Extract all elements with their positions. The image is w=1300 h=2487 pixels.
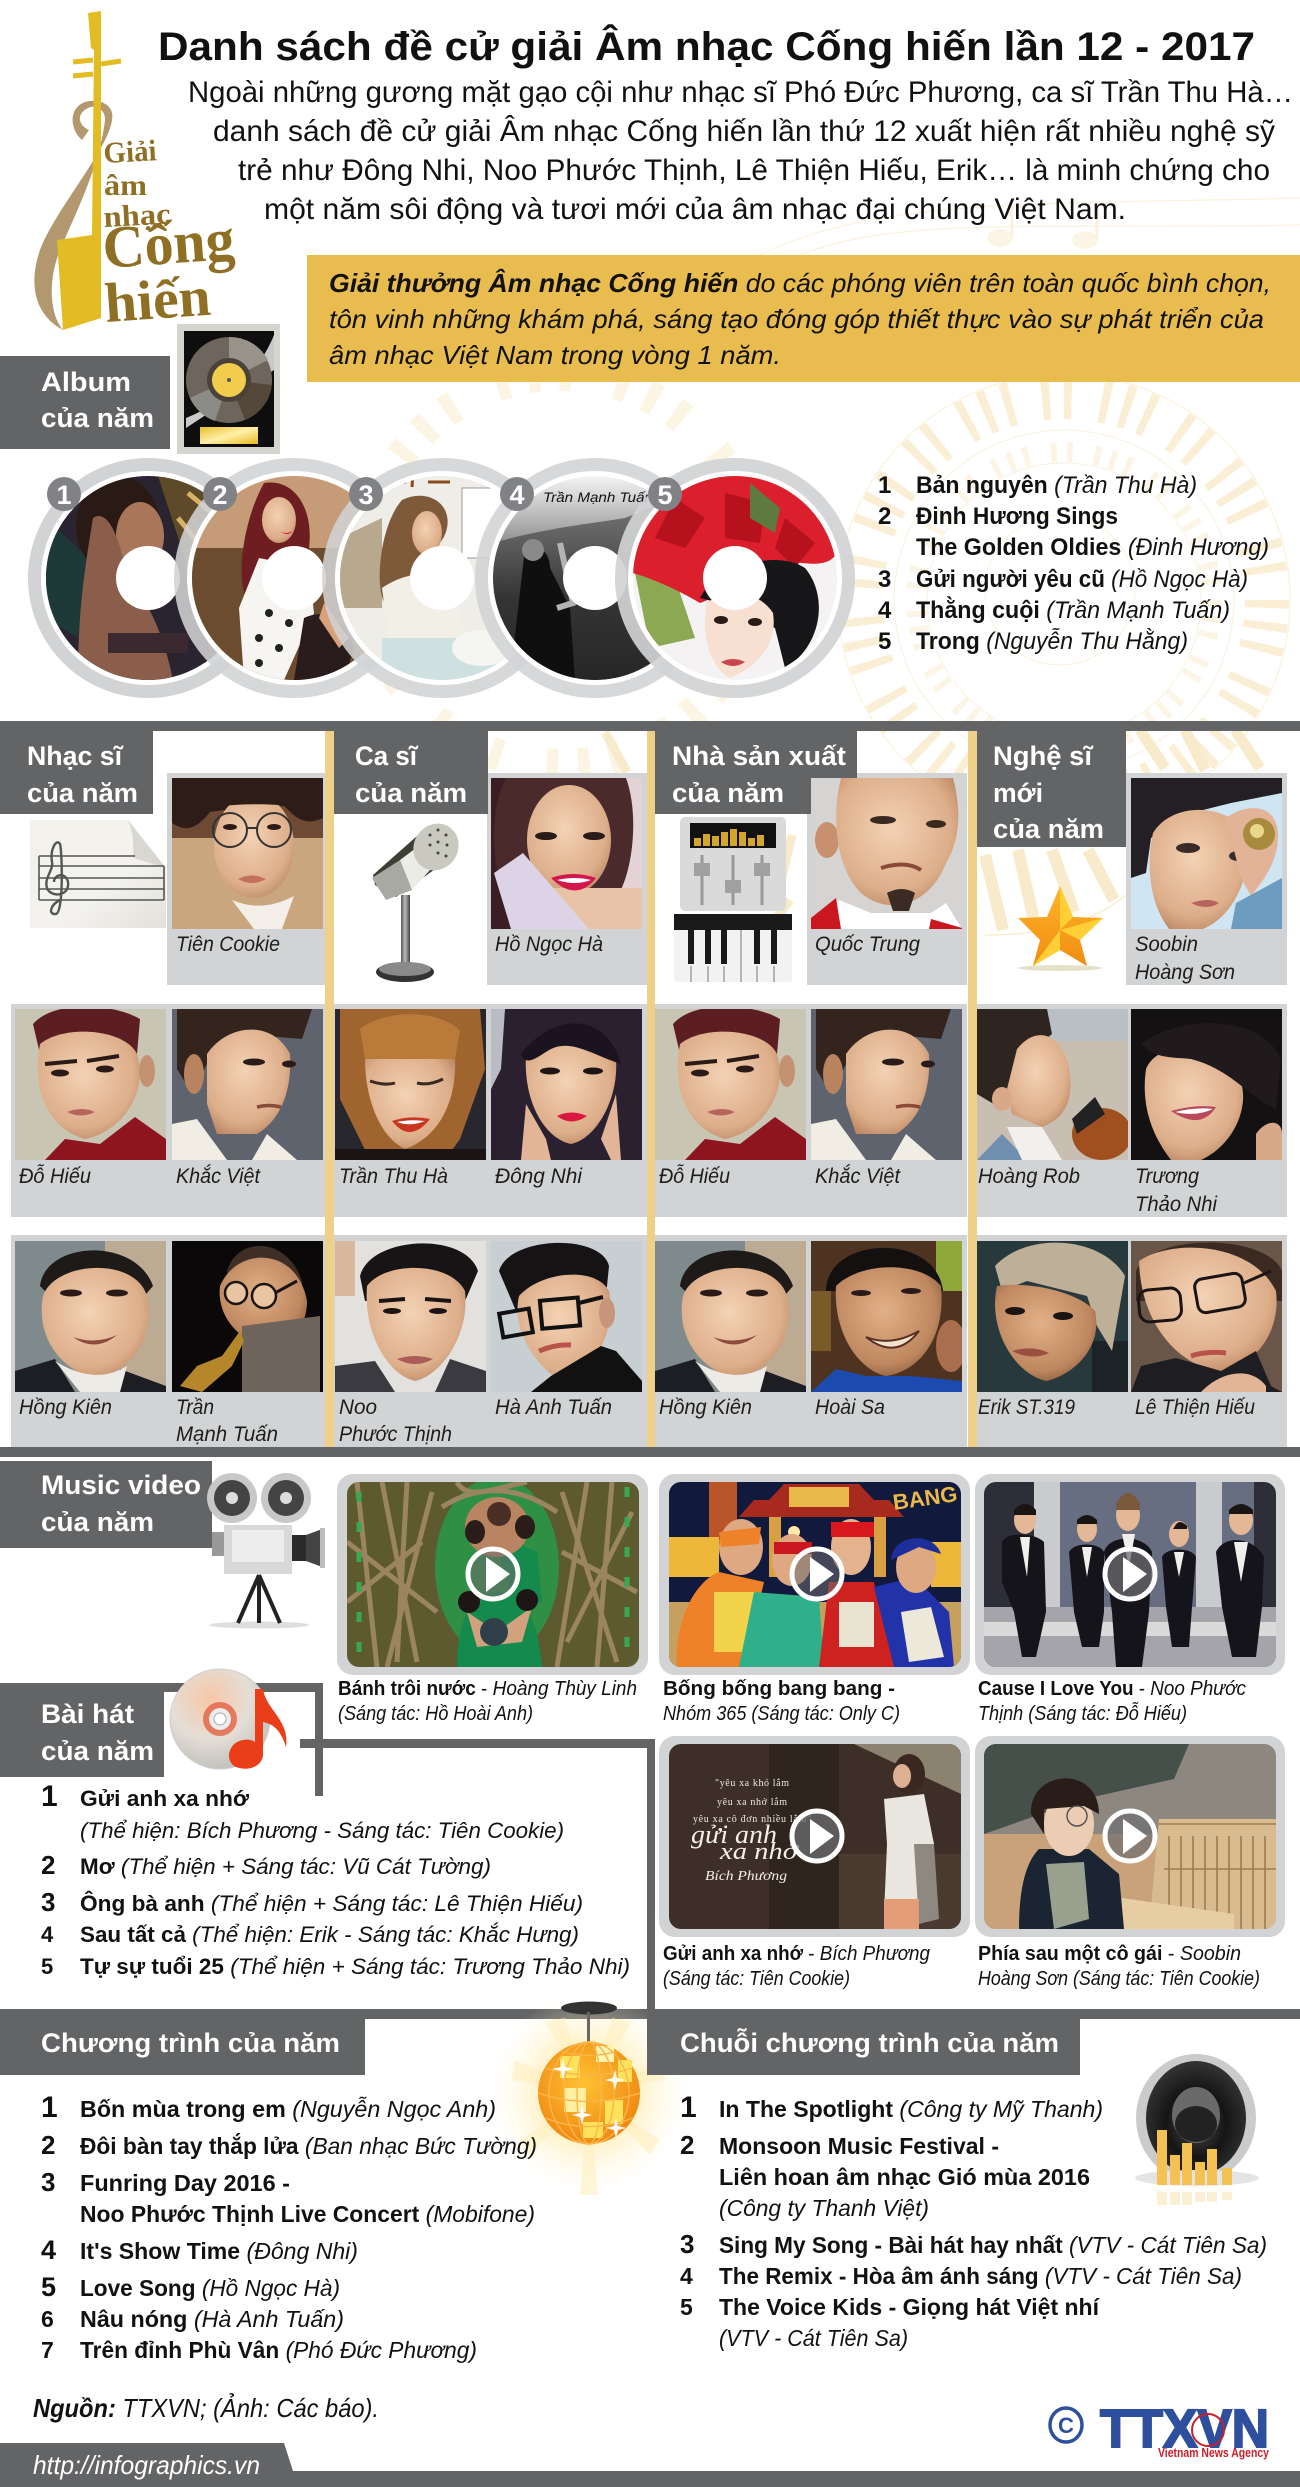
heading: Music video của năm: Music video — [41, 1470, 201, 1500]
list: programmes of the year: Đôi bàn tay thắp lửa (Ban nhạc Bức Tường) — [80, 2132, 537, 2159]
heading: Chuỗi chương trình của năm: Chuỗi chương trình của năm — [680, 2027, 1059, 2058]
source note: Nguồn: TTXVN; (Ảnh: Các báo). — [33, 2392, 379, 2423]
list: songs of the year — [41, 1780, 630, 1979]
video card: Gửi anh xa nhớ — [659, 1736, 970, 1990]
icon: film projector — [207, 1473, 325, 1628]
list: programme series of the year: Sing My Song - Bài hát hay nhất (VTV - Cát Tiên Sa) — [719, 2232, 1267, 2258]
video card: Phía sau một cô gái — [975, 1736, 1285, 1990]
icon: disco ball — [489, 1993, 689, 2195]
logo: TTXVN Vietnam News Agency: Vietnam News Agency — [1158, 2445, 1270, 2460]
heading: Ca sĩ của năm: Ca sĩ — [355, 741, 418, 771]
person: Hồng Kiên — [15, 1241, 166, 1419]
connector lines — [150, 1683, 655, 2014]
icon: speaker with equalizer — [1135, 2054, 1259, 2205]
icon: CD and music note — [170, 1669, 286, 1769]
list: songs of the year: Mơ (Thể hiện + Sáng tác: Vũ Cát Tường) — [80, 1854, 491, 1879]
list: programmes of the year: 2 — [41, 2130, 55, 2160]
heading: Music video của năm — [0, 1461, 212, 1548]
person: Hồng Kiên (producer) — [655, 1241, 806, 1419]
video card: Phía sau một cô gái: Hoàng Sơn (Sáng tác: Tiên Cookie) — [978, 1968, 1260, 1990]
heading: Nghệ sĩ mới của năm: Nghệ sĩ — [993, 741, 1094, 771]
list: programmes of the year: Love Song (Hồ Ngọc Hà) — [80, 2275, 340, 2301]
icon: sheet music — [30, 820, 166, 928]
video card: Gửi anh xa nhớ: yêu xa nhớ lắm — [717, 1797, 787, 1808]
person: Noo Phước Thịnh: Phước Thịnh — [339, 1423, 452, 1446]
list: programmes of the year: Trên đỉnh Phù Vân (Phó Đức Phương) — [80, 2337, 477, 2363]
list: programme series of the year: The Remix - Hòa âm ánh sáng (VTV - Cát Tiên Sa) — [719, 2263, 1242, 2289]
person: Hoàng Rob — [977, 1009, 1132, 1188]
video card: Phía sau một cô gái: Phía sau một cô gái - Soobin — [978, 1943, 1241, 1965]
list: songs of the year: 3 — [41, 1887, 55, 1917]
person: Hồng Kiên: Hồng Kiên — [19, 1396, 112, 1419]
album list: 1 — [878, 472, 891, 499]
list: programmes of the year — [41, 2091, 537, 2363]
heading: Bài hát của năm: của năm — [41, 1736, 154, 1766]
heading: Chuỗi chương trình của năm — [647, 2009, 1080, 2075]
logo: TTXVN Vietnam News Agency: C — [1058, 2413, 1074, 2438]
list: programme series of the year: (VTV - Cát Tiên Sa) — [719, 2325, 908, 2351]
person: Lê Thiện Hiếu: Lê Thiện Hiếu — [1135, 1396, 1255, 1419]
heading: Nhà sản xuất của năm: của năm — [672, 778, 784, 808]
person: Erik ST.319 — [977, 1241, 1128, 1419]
person: Hoài Sa — [811, 1241, 966, 1419]
person: Noo Phước Thịnh: Noo — [339, 1396, 377, 1419]
video card: Bống bống bang bang — [659, 1474, 970, 1725]
list: songs of the year: 5 — [41, 1954, 53, 1979]
disc number badges: 5 — [657, 480, 673, 510]
person: Khắc Việt — [172, 1009, 323, 1188]
disc 4: Trần Mạnh Tuấn — [543, 489, 653, 505]
intro paragraph: danh sách đề cử giải Âm nhạc Cống hiến lần thứ 12 xuất hiện rất nhiều nghệ sỹ — [213, 115, 1275, 148]
video card: Cause I Love You: Cause I Love You - Noo Phước — [978, 1678, 1246, 1700]
heading: Nghệ sĩ mới của năm — [977, 731, 1126, 847]
video card: Gửi anh xa nhớ: (Sáng tác: Tiên Cookie) — [663, 1968, 850, 1990]
heading: Nhạc sĩ của năm: Nhạc sĩ — [27, 741, 123, 771]
list: programme series of the year: (Công ty Thanh Việt) — [719, 2195, 929, 2221]
video card: Gửi anh xa nhớ: xa nhớ — [719, 1839, 799, 1865]
album list: Đinh Hương Sings — [916, 503, 1118, 530]
list: songs of the year: Ông bà anh (Thể hiện + Sáng tác: Lê Thiện Hiếu) — [80, 1891, 583, 1916]
video card: Gửi anh xa nhớ: yêu xa cô đơn nhiều lắm" — [693, 1814, 811, 1825]
album list — [878, 472, 1269, 655]
list: programmes of the year: Nâu nóng (Hà Anh Tuấn) — [80, 2306, 344, 2332]
album list: Trong (Nguyễn Thu Hằng) — [916, 627, 1188, 655]
person: Quốc Trung — [811, 778, 962, 956]
heading: Ca sĩ của năm: của năm — [355, 778, 467, 808]
intro paragraph — [188, 76, 1293, 226]
person: Khắc Việt (producer): Khắc Việt — [815, 1165, 901, 1188]
video card: Bánh trôi nước: (Sáng tác: Hồ Hoài Anh) — [338, 1703, 533, 1725]
icon: gold record — [177, 324, 280, 454]
logo: Giải Âm nhạc Cống hiến: hiến — [103, 266, 213, 335]
person: Hoàng Rob: Hoàng Rob — [978, 1165, 1080, 1188]
list: programme series of the year: In The Spotlight (Công ty Mỹ Thanh) — [719, 2096, 1103, 2122]
footer bar with URL — [0, 2443, 1300, 2487]
heading: Album của năm: Album — [41, 367, 131, 397]
list: programme series of the year: 2 — [680, 2130, 694, 2160]
disc 3 — [322, 458, 518, 698]
album list: The Golden Oldies (Đinh Hương) — [916, 534, 1269, 561]
person: Hồ Ngọc Hà — [491, 778, 642, 956]
heading: Bài hát của năm: Bài hát — [41, 1699, 134, 1729]
panel: award description: tôn vinh những khám phá, sáng tạo đóng góp thiết thực vào sự phát triển của — [329, 304, 1264, 334]
person: Đông Nhi: Đông Nhi — [495, 1165, 583, 1188]
logo: Giải Âm nhạc Cống hiến: nhạc — [103, 198, 171, 234]
disc 1 — [28, 458, 221, 698]
list: programmes of the year: 4 — [41, 2235, 56, 2265]
person: Khắc Việt (producer) — [811, 1009, 962, 1188]
heading: Nhà sản xuất của năm — [655, 731, 857, 814]
list: songs of the year: 2 — [41, 1850, 55, 1880]
list: programme series of the year: Liên hoan âm nhạc Gió mùa 2016 — [719, 2164, 1090, 2190]
heading: Nhạc sĩ của năm — [0, 731, 153, 814]
video card: Bống bống bang bang: Nhóm 365 (Sáng tác: Only C) — [663, 1703, 900, 1725]
person: Hà Anh Tuấn: Hà Anh Tuấn — [495, 1396, 612, 1419]
disc number badges: 3 — [358, 480, 374, 510]
album list: 2 — [878, 503, 891, 530]
list: songs of the year: 4 — [41, 1922, 54, 1947]
person: Noo Phước Thịnh — [335, 1241, 486, 1446]
icon: mixer and piano keys — [674, 817, 792, 982]
person: Trần Mạnh Tuấn: Trần — [176, 1396, 214, 1419]
list: songs of the year: (Thể hiện: Bích Phương - Sáng tác: Tiên Cookie) — [80, 1818, 564, 1843]
person: Trần Mạnh Tuấn — [172, 1241, 323, 1446]
list: programme series of the year — [680, 2091, 1267, 2351]
list: programme series of the year: 5 — [680, 2294, 693, 2320]
list: programmes of the year: 6 — [41, 2306, 54, 2332]
person: Trương Thảo Nhi: Trương — [1135, 1165, 1199, 1188]
person: Soobin Hoàng Sơn: Hoàng Sơn — [1135, 961, 1235, 984]
person: Hồ Ngọc Hà: Hồ Ngọc Hà — [495, 933, 603, 956]
person: Trương Thảo Nhi — [1131, 1009, 1282, 1216]
footer bar with URL: http://infographics.vn — [33, 2450, 260, 2480]
panel: award description — [307, 255, 1300, 382]
video card: Cause I Love You — [975, 1474, 1285, 1725]
panel: award description: âm nhạc Việt Nam trong vòng 1 năm. — [329, 340, 781, 370]
people section frame bars — [0, 721, 1300, 1457]
disc 2 — [174, 458, 368, 698]
person: Lê Thiện Hiếu — [1131, 1241, 1282, 1419]
list: programmes of the year: 7 — [41, 2337, 54, 2363]
logo: TTXVN Vietnam News Agency: TTXVN — [1100, 2399, 1269, 2459]
heading: Chương trình của năm: Chương trình của năm — [41, 2028, 340, 2058]
list: programmes of the year: 5 — [41, 2272, 56, 2302]
heading: Nghệ sĩ mới của năm: của năm — [993, 814, 1104, 844]
list: songs of the year: Tự sự tuổi 25 (Thể hiện + Sáng tác: Trương Thảo Nhi) — [80, 1954, 630, 1979]
list: songs of the year: 1 — [41, 1780, 58, 1813]
column dividers — [325, 731, 977, 1447]
icon: star — [1018, 886, 1103, 971]
heading: Music video của năm: của năm — [41, 1507, 154, 1537]
person: Erik ST.319: Erik ST.319 — [978, 1396, 1075, 1419]
album list: 5 — [878, 628, 891, 655]
heading: Album của năm: của năm — [41, 403, 154, 433]
video card: Cause I Love You: Thịnh (Sáng tác: Đỗ Hiếu) — [978, 1702, 1187, 1725]
person: Soobin Hoàng Sơn: Soobin — [1135, 933, 1198, 956]
logo: Giải Âm nhạc Cống hiến: âm — [104, 169, 147, 202]
person: Hà Anh Tuấn — [491, 1241, 642, 1419]
heading: Bài hát của năm — [0, 1683, 164, 1777]
video card: Gửi anh xa nhớ: "yêu xa khó lắm — [715, 1778, 789, 1789]
logo: Giải Âm nhạc Cống hiến: Giải — [103, 134, 157, 170]
list: programme series of the year: 1 — [680, 2091, 697, 2124]
video card: Bống bống bang bang: Bống bống bang bang - — [663, 1678, 895, 1700]
heading: Nghệ sĩ mới của năm: mới — [993, 778, 1043, 808]
album list: 3 — [878, 566, 891, 593]
logo: Giải Âm nhạc Cống hiến: Cống — [100, 206, 237, 281]
person: Đông Nhi — [491, 1009, 642, 1188]
disc 4 — [475, 458, 665, 698]
disc number badges: 2 — [212, 480, 228, 510]
icon: microphone — [372, 815, 468, 982]
title: Danh sách đề cử giải Âm nhạc Cống hiến lần 12 - 2017 — [158, 23, 1255, 69]
person: Đỗ Hiếu — [15, 1006, 166, 1188]
video card: Gửi anh xa nhớ: Gửi anh xa nhớ - Bích Phương — [663, 1943, 930, 1965]
album discs — [28, 458, 855, 698]
person: Soobin Hoàng Sơn — [1131, 778, 1282, 984]
list: songs of the year: Sau tất cả (Thể hiện: Erik - Sáng tác: Khắc Hưng) — [80, 1922, 579, 1947]
disc number badges — [47, 477, 682, 511]
person: Tiên Cookie — [172, 778, 323, 956]
heading: Album của năm — [0, 356, 170, 449]
video card: Gửi anh xa nhớ: Bích Phương — [705, 1869, 787, 1884]
list: programmes of the year: It's Show Time (Đông Nhi) — [80, 2238, 358, 2264]
person: Hồng Kiên (producer): Hồng Kiên — [659, 1396, 752, 1419]
album list: 4 — [878, 597, 892, 624]
intro paragraph: trẻ như Đông Nhi, Noo Phước Thịnh, Lê Thiện Hiếu, Erik… là minh chứng cho — [238, 154, 1270, 187]
person: Đỗ Hiếu (producer): Đỗ Hiếu — [659, 1165, 730, 1188]
logo: Giải Âm nhạc Cống hiến — [34, 11, 237, 335]
list: programme series of the year: Monsoon Music Festival - — [719, 2133, 999, 2159]
album list: Gửi người yêu cũ (Hồ Ngọc Hà) — [916, 566, 1248, 593]
person: Trương Thảo Nhi: Thảo Nhi — [1135, 1193, 1218, 1216]
panel: award description: Giải thưởng Âm nhạc Cống hiến do các phóng viên trên toàn quốc bình chọn, — [329, 268, 1271, 298]
person: Quốc Trung: Quốc Trung — [815, 933, 920, 956]
video card: Bống bống bang bang: BANG — [891, 1481, 959, 1515]
person: Trần Mạnh Tuấn: Mạnh Tuấn — [176, 1423, 278, 1446]
person: Đỗ Hiếu: Đỗ Hiếu — [19, 1165, 91, 1188]
heading: Nhà sản xuất của năm: Nhà sản xuất — [672, 741, 846, 771]
video card: Bánh trôi nước — [337, 1474, 648, 1725]
person: Trần Thu Hà — [335, 1009, 486, 1188]
heading: Chương trình của năm — [0, 2009, 365, 2075]
list: songs of the year: Gửi anh xa nhớ — [80, 1786, 249, 1811]
person: Đỗ Hiếu (producer) — [655, 1006, 806, 1188]
list: programme series of the year: 3 — [680, 2229, 694, 2259]
list: programmes of the year: 1 — [41, 2091, 58, 2124]
disc number badges: 1 — [56, 480, 72, 510]
person: Tiên Cookie: Tiên Cookie — [176, 933, 280, 956]
heading: Nhạc sĩ của năm: của năm — [27, 778, 138, 808]
people grey cards — [11, 773, 1287, 1447]
person: Khắc Việt: Khắc Việt — [176, 1165, 261, 1188]
person: Trần Thu Hà: Trần Thu Hà — [339, 1165, 448, 1188]
disc 5 — [615, 458, 855, 698]
list: programmes of the year: Bốn mùa trong em (Nguyễn Ngọc Anh) — [80, 2095, 496, 2122]
intro paragraph: một năm sôi động và tươi mới của âm nhạc đại chúng Việt Nam. — [264, 193, 1126, 226]
video card: Gửi anh xa nhớ: gửi anh — [691, 1820, 777, 1849]
list: programmes of the year: Funring Day 2016 - — [80, 2170, 290, 2196]
list: programmes of the year: Noo Phước Thịnh Live Concert (Mobifone) — [80, 2201, 535, 2227]
disc number badges: 4 — [509, 480, 525, 510]
album list: Bản nguyên (Trần Thu Hà) — [916, 472, 1197, 499]
heading: Ca sĩ của năm — [334, 731, 488, 814]
list: programme series of the year: 4 — [680, 2263, 693, 2289]
person: Hoài Sa: Hoài Sa — [815, 1396, 885, 1419]
list: programmes of the year: 3 — [41, 2167, 55, 2197]
video card: Bánh trôi nước: Bánh trôi nước - Hoàng Thùy Linh — [338, 1678, 637, 1700]
list: programme series of the year: The Voice Kids - Giọng hát Việt nhí — [719, 2294, 1100, 2320]
intro paragraph: Ngoài những gương mặt gạo cội như nhạc sĩ Phó Đức Phương, ca sĩ Trần Thu Hà… — [188, 76, 1293, 109]
programme section bar — [0, 2009, 1300, 2019]
album list: Thằng cuội (Trần Mạnh Tuấn) — [916, 596, 1230, 624]
